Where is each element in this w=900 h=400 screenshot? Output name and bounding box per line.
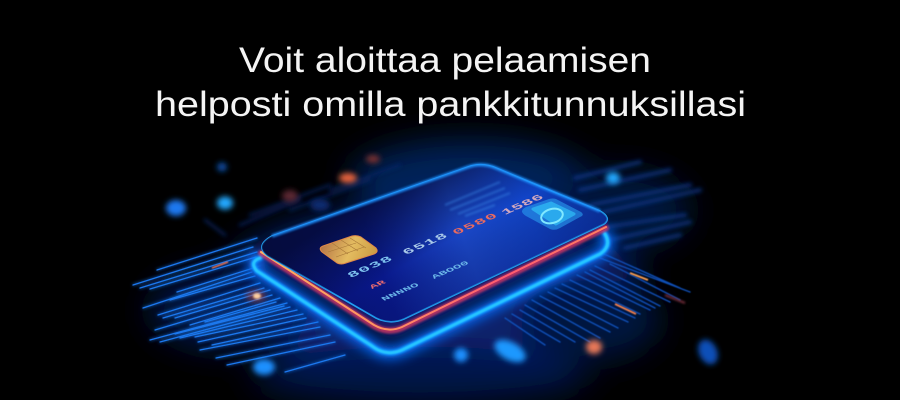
credit card: [261, 165, 608, 331]
card small text: ABOO0: [430, 260, 472, 281]
card small text: NNNNO: [380, 282, 422, 303]
EMV chip: [320, 236, 377, 264]
lower glow ring: [254, 234, 608, 353]
circuit lines: lower right: [505, 254, 690, 345]
title line 2: helposti omilla pankkitunnuksillasi: [155, 85, 746, 124]
card number: 1586: [499, 193, 547, 217]
circuit lines: upper left: [205, 165, 400, 235]
contactless block: [522, 198, 583, 230]
spark streaks: [212, 262, 685, 314]
card edge body: [262, 218, 608, 331]
light dots: blue: [166, 162, 722, 375]
title line 1: Voit aloittaa pelaamisen: [239, 41, 651, 80]
red edge light: [261, 227, 606, 331]
circuit lines: left: [133, 238, 345, 372]
gloss streaks: [445, 182, 510, 216]
card number: 0580: [450, 211, 502, 237]
circuit lines: upper right: [575, 162, 700, 248]
card small text: AR: [368, 279, 389, 291]
card number: [345, 193, 547, 280]
title: [155, 41, 746, 124]
background glow: [150, 140, 690, 400]
top edge glow: [272, 165, 600, 236]
card face: [262, 165, 607, 322]
dark shadow under card: [250, 240, 610, 350]
card number: 8038: [345, 254, 397, 280]
card number: 6518: [400, 231, 452, 257]
card small text: [368, 260, 472, 303]
card face shading: [262, 165, 607, 322]
light dots: orange: [282, 155, 602, 354]
